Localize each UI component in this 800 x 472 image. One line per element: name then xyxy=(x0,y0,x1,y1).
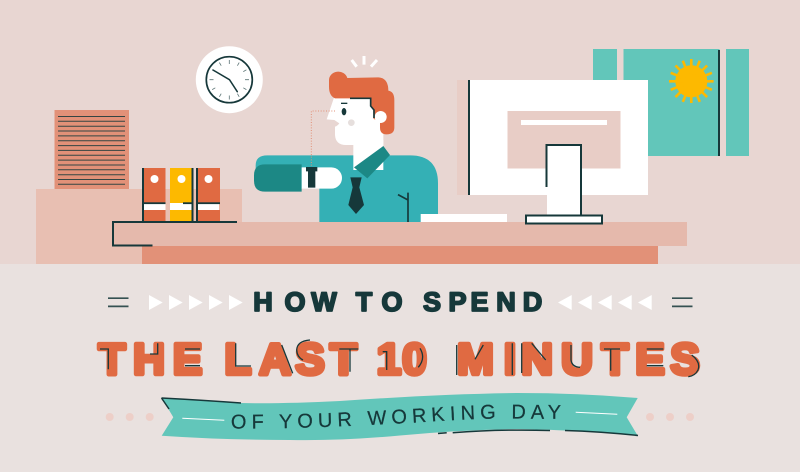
double dash left xyxy=(108,298,128,306)
hand xyxy=(302,167,342,189)
hairline shadow xyxy=(350,98,374,118)
icon: sun xyxy=(669,59,714,103)
dots left xyxy=(106,413,154,421)
binder: orange right xyxy=(196,168,220,222)
cheek xyxy=(348,119,355,126)
ear xyxy=(375,111,387,123)
wall clock xyxy=(196,46,263,113)
ribbon highlights xyxy=(182,412,617,420)
eye and eyebrow xyxy=(341,103,347,115)
ribbon accent lines xyxy=(162,398,638,436)
binder: yellow middle xyxy=(170,168,194,222)
binder: orange left xyxy=(142,168,166,222)
heading: how to spend: HOW TO SPEND xyxy=(253,287,542,317)
ribbon text: OF YOUR WORKING DAY xyxy=(232,404,561,429)
desk xyxy=(113,222,687,264)
surprise marks xyxy=(352,56,377,67)
notice board with text lines xyxy=(54,110,129,189)
ribbon guide curve xyxy=(231,418,575,429)
binders xyxy=(142,168,220,222)
shirt and raised arm xyxy=(256,155,438,222)
window with sun xyxy=(593,49,749,156)
ribbon shape xyxy=(162,393,638,440)
wristwatch xyxy=(306,167,317,188)
dots right xyxy=(646,413,694,421)
heading: the last 10 minutes: THE LAST 10 MINUTES xyxy=(99,335,700,384)
title area background xyxy=(0,264,800,472)
head xyxy=(327,98,383,145)
heading accent lines xyxy=(100,340,699,377)
dotted line of sight xyxy=(311,111,335,167)
keyboard xyxy=(421,214,507,222)
necktie xyxy=(348,177,364,214)
neck xyxy=(353,140,383,170)
ribbon banner xyxy=(160,393,638,440)
sleeve cuff xyxy=(254,164,302,192)
computer monitor xyxy=(457,80,648,224)
side cabinet xyxy=(36,189,242,264)
decorative arrows left xyxy=(149,295,243,310)
decorative arrows right xyxy=(558,295,652,310)
man looking at his watch xyxy=(254,56,438,222)
shirt pocket line xyxy=(398,193,408,222)
collar xyxy=(354,146,390,178)
hair xyxy=(329,72,394,134)
double dash right xyxy=(672,298,692,306)
office wall background xyxy=(0,0,800,264)
